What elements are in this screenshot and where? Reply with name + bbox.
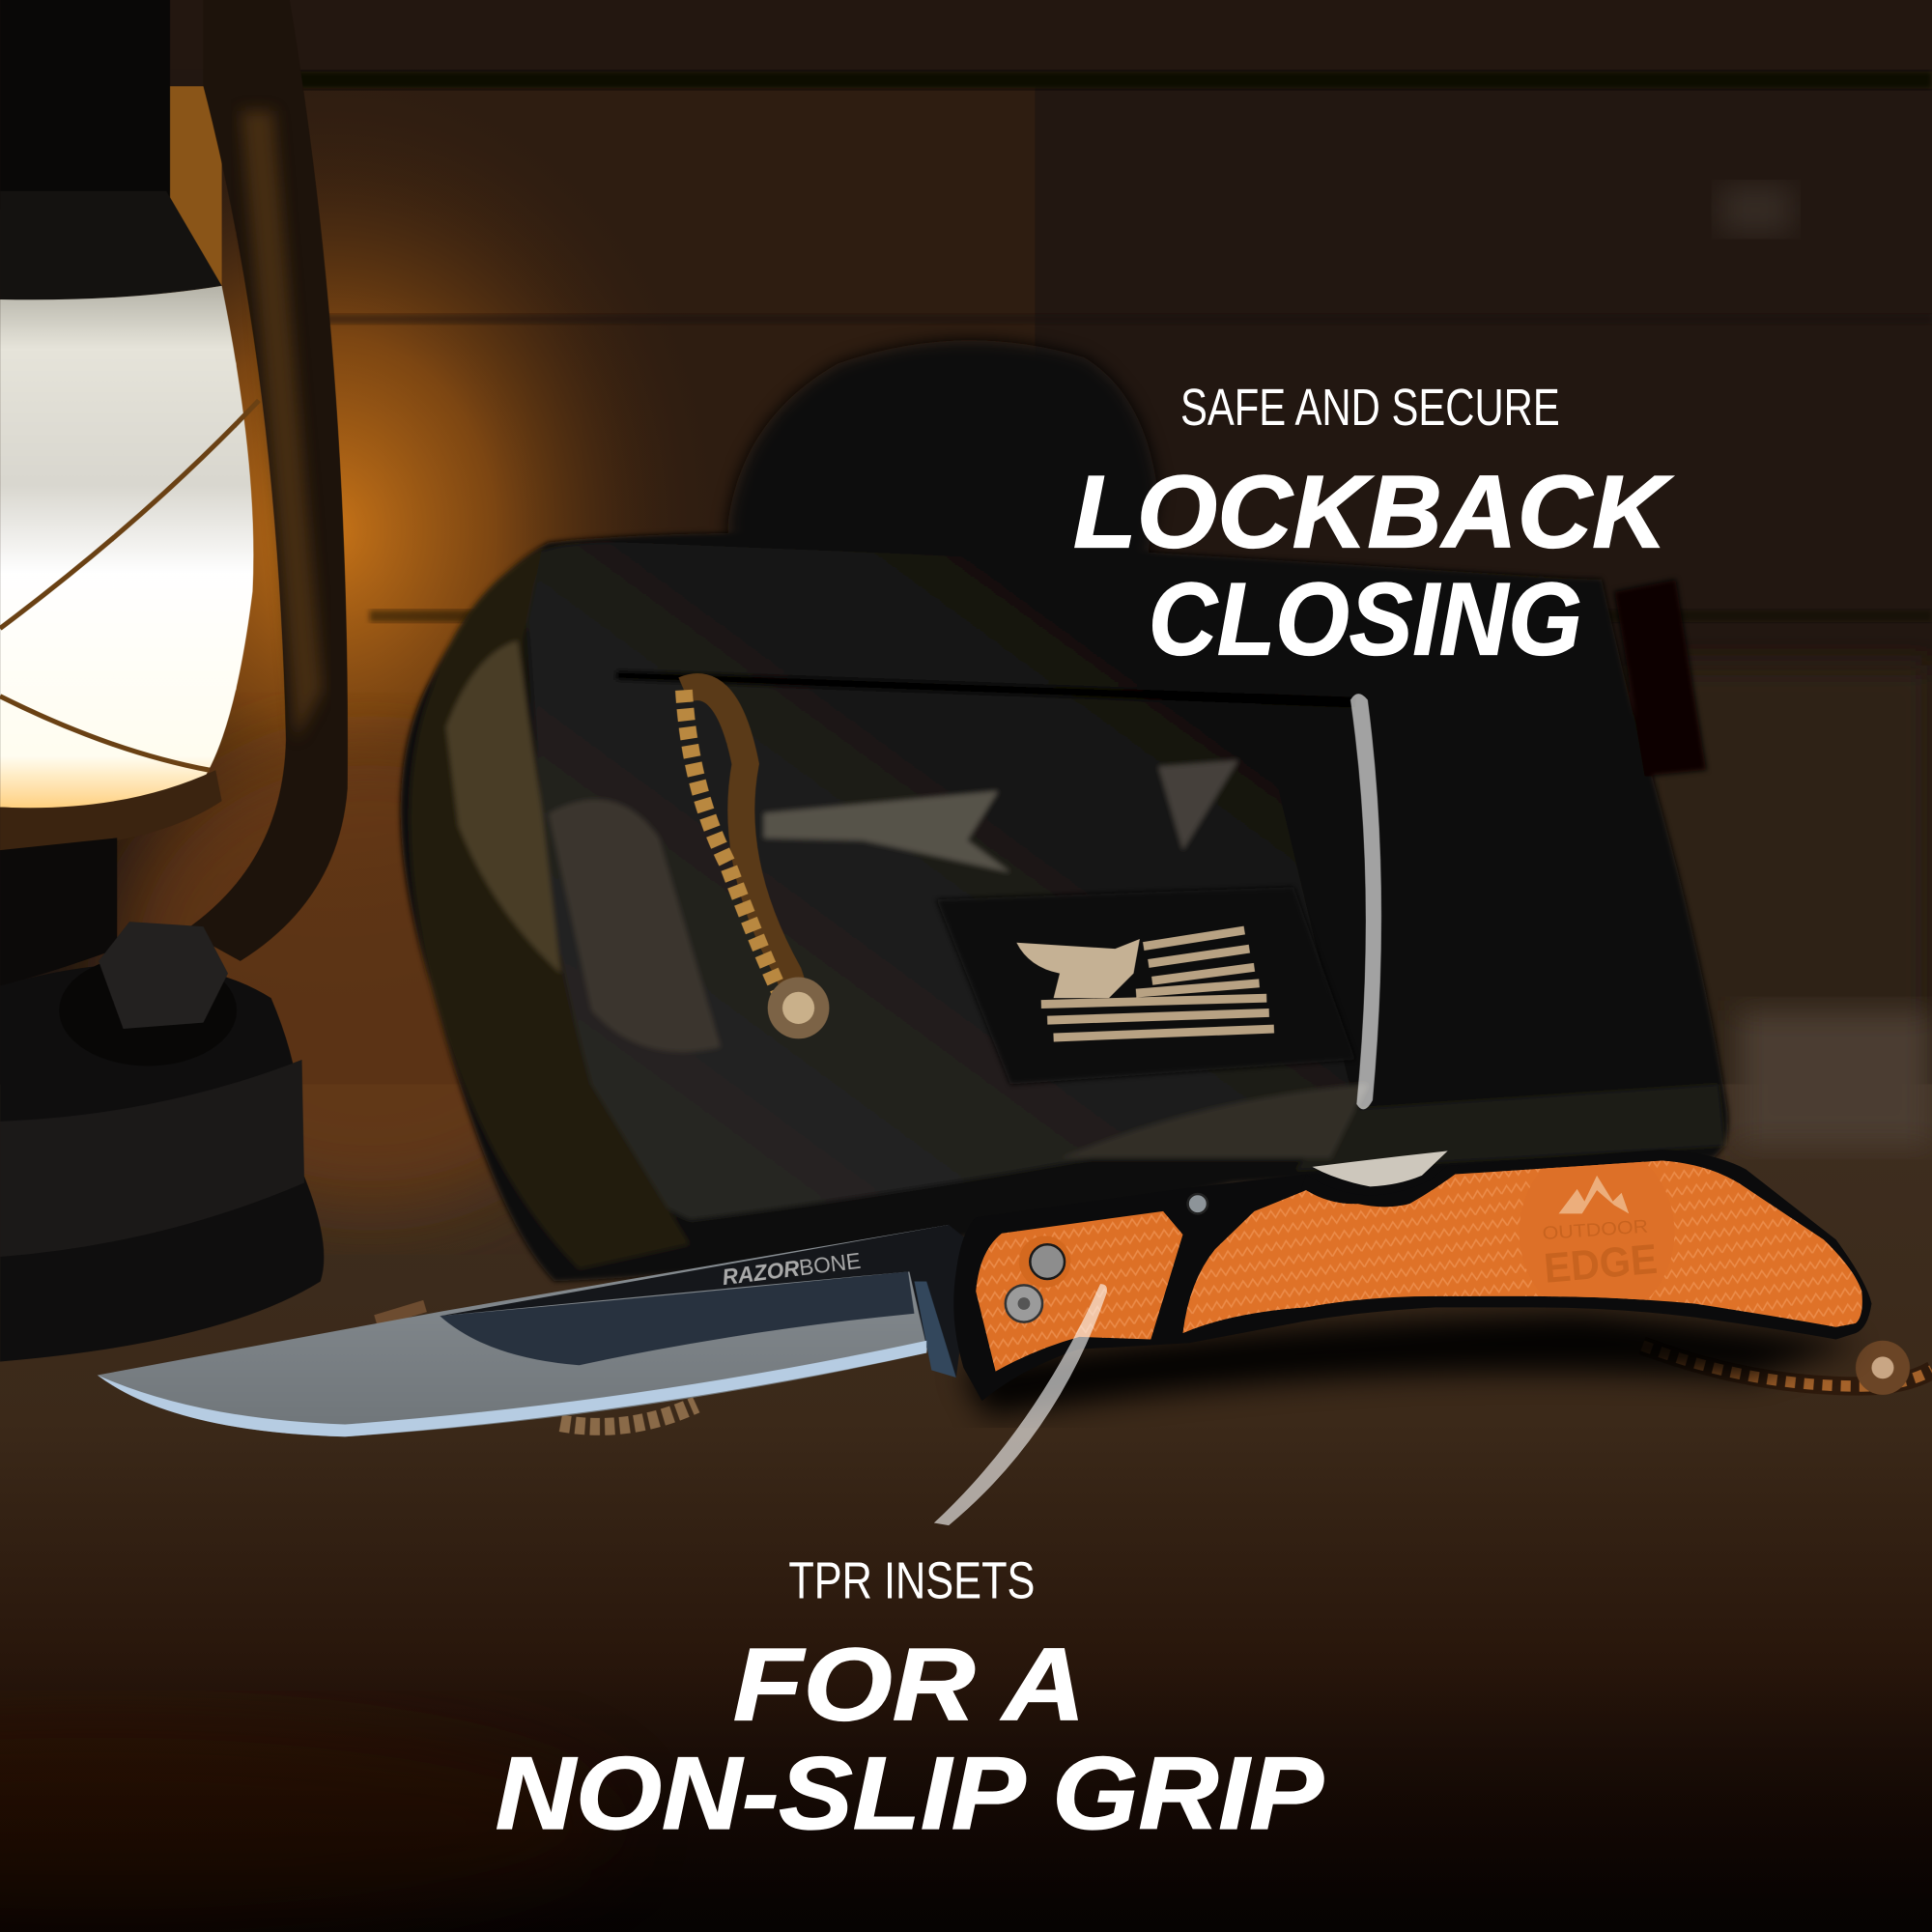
cord under knife [376, 1306, 1932, 1427]
pointer: tpr insets [934, 1284, 1107, 1525]
callout: safe and secure: SAFE AND SECURE [1180, 380, 1560, 437]
knife shadow [961, 1312, 1861, 1417]
dark pouch bag [401, 340, 1728, 1282]
floor surface [0, 739, 1932, 1932]
paracord zipper pull [684, 687, 829, 1038]
logo: EDGE [1542, 1236, 1659, 1293]
heading: for a non-slip grip: NON-SLIP GRIP [496, 1735, 1323, 1851]
front orange inset [976, 1211, 1182, 1372]
heading: lockback closing: LOCKBACK [1073, 453, 1673, 569]
handle frame [953, 1150, 1872, 1401]
lantern [0, 0, 348, 1361]
logo [1542, 1176, 1659, 1293]
screws [1019, 1236, 1070, 1288]
callout: tpr insets: TPR INSETS [788, 1552, 1035, 1609]
flag patch [936, 887, 1355, 1084]
blade [98, 1225, 949, 1436]
wood wall background [0, 0, 1932, 1233]
pointer: lockback [1350, 694, 1381, 1109]
logo medallion [1520, 1161, 1675, 1300]
blade logo: RAZORBONE [721, 1248, 862, 1290]
heading: for a non-slip grip: FOR A [733, 1627, 1086, 1743]
heading: for a non-slip grip [496, 1627, 1323, 1851]
heading: lockback closing [1073, 453, 1673, 676]
main orange inset [1182, 1161, 1862, 1333]
knife [98, 1144, 1873, 1436]
logo: OUTDOOR [1542, 1217, 1649, 1244]
heading: lockback closing: CLOSING [1149, 560, 1582, 676]
thumb blade tip [1312, 1151, 1448, 1186]
